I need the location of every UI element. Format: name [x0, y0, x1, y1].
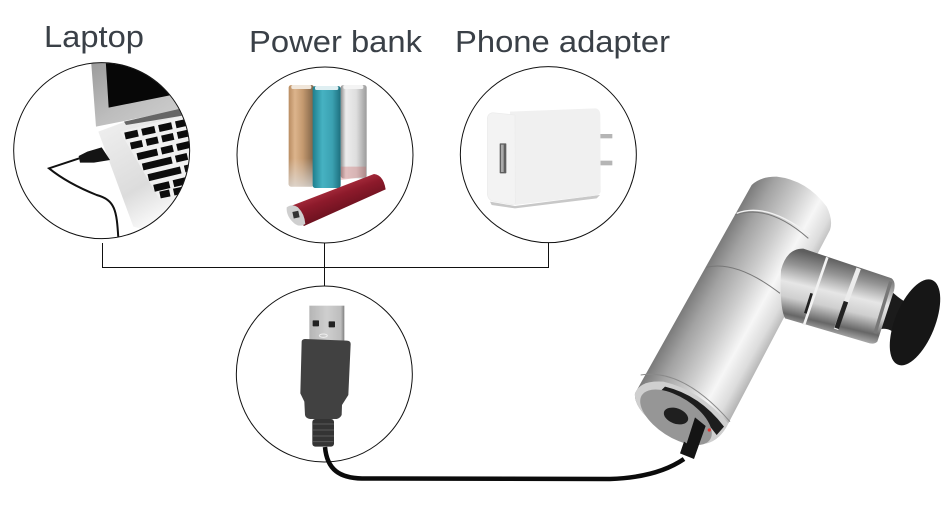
panel: phone adapter circle	[460, 67, 636, 243]
USB cable into laptop	[49, 147, 118, 238]
USB strain relief	[312, 419, 334, 447]
gold power bank	[289, 85, 314, 187]
massage gun	[631, 177, 948, 459]
power bank circle outline	[237, 67, 413, 243]
adapter body	[487, 108, 601, 205]
body end cap	[631, 378, 728, 456]
laptop base	[98, 116, 188, 228]
massage head	[877, 272, 948, 372]
label: Power bank: Power bank	[249, 24, 423, 59]
teal power bank	[313, 86, 341, 188]
panel: power bank circle	[237, 67, 413, 243]
adapter shadow	[490, 195, 600, 208]
micro USB connector	[680, 417, 706, 459]
panel: laptop circle	[14, 60, 195, 239]
label: Phone adapter: Phone adapter	[455, 24, 670, 59]
laptop circle outline	[14, 63, 190, 239]
keyboard	[124, 116, 190, 198]
adapter prongs	[600, 134, 612, 165]
body cylinder	[635, 177, 831, 443]
connector lines	[102, 243, 548, 286]
USB plug body	[300, 339, 351, 419]
adapter circle outline	[460, 67, 636, 243]
charging cable	[325, 447, 684, 479]
arm	[781, 249, 895, 344]
USB circle outline	[236, 286, 412, 462]
red power bank	[287, 174, 386, 226]
laptop lid and screen	[91, 60, 187, 127]
USB metal tip	[309, 306, 344, 342]
panel: USB plug circle	[236, 286, 412, 462]
silver power bank	[341, 85, 367, 180]
label: Laptop: Laptop	[44, 19, 144, 54]
